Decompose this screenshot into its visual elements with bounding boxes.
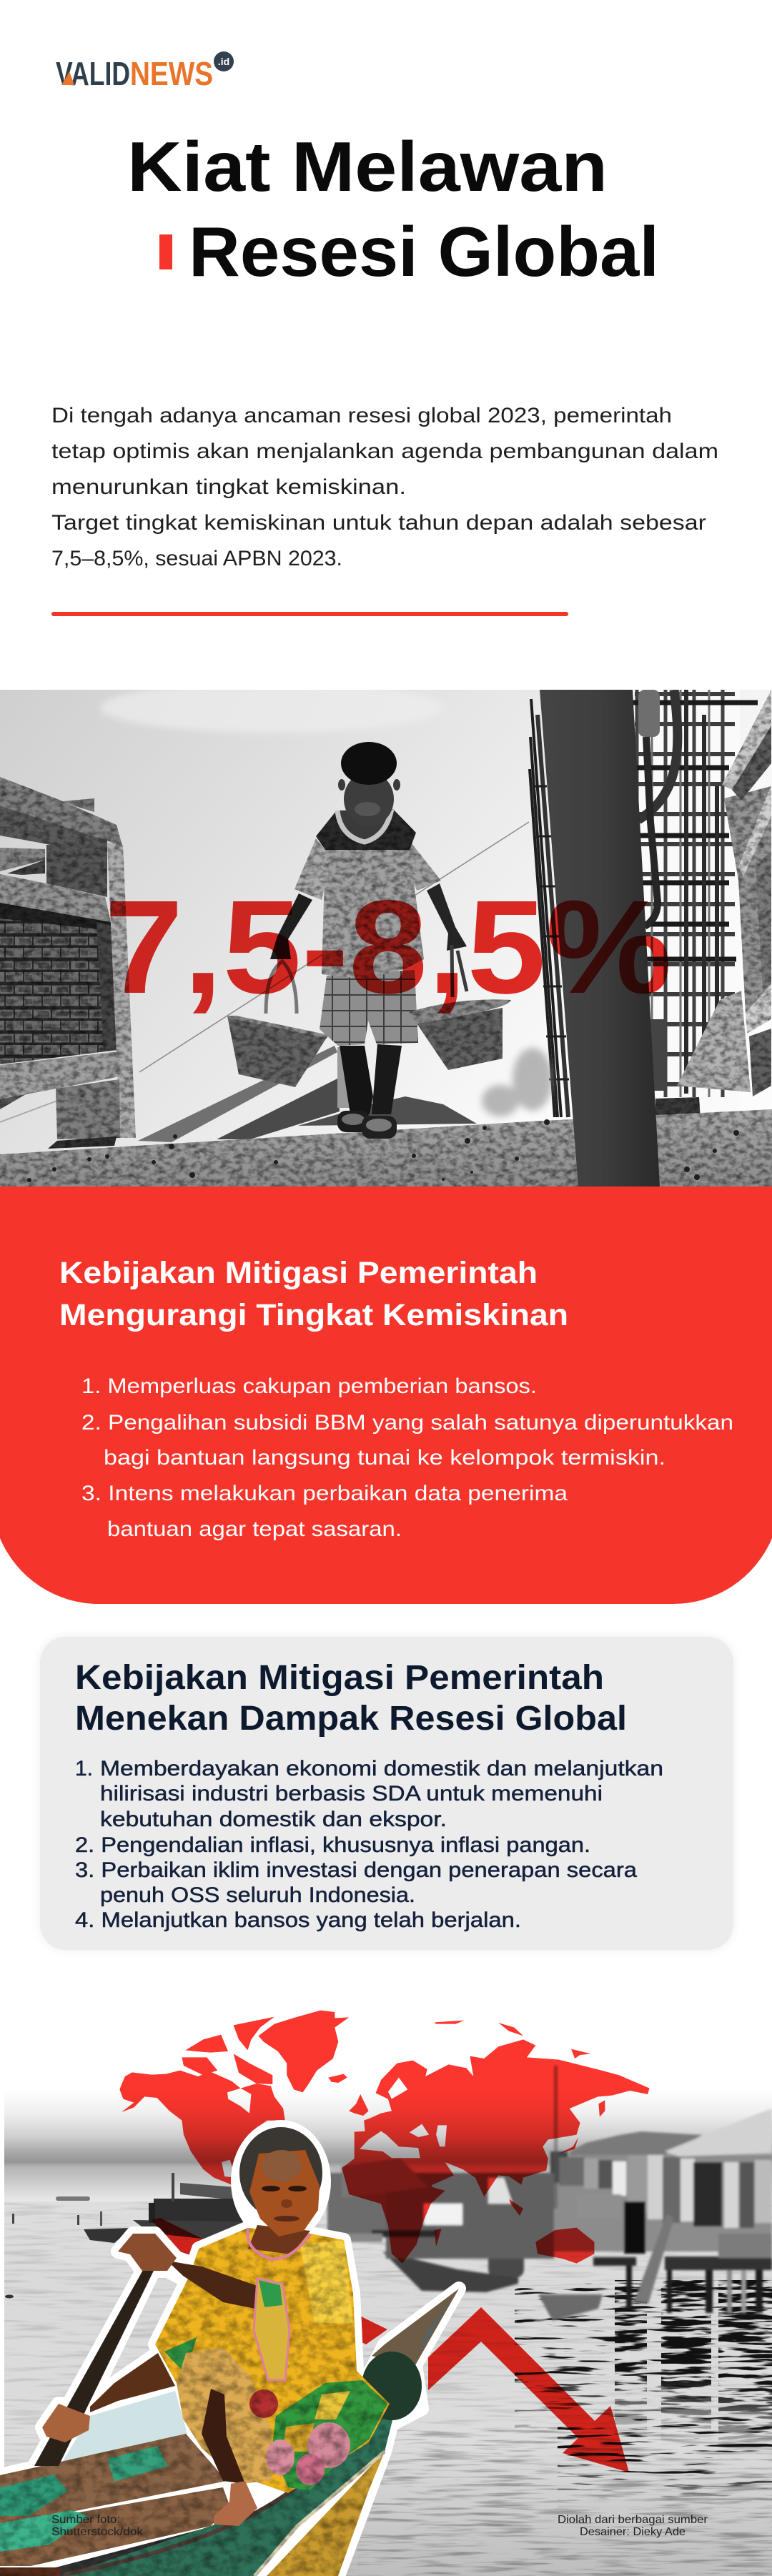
numbered list: Memberdayakan ekonomi domestik dan melanjutkan — [100, 1757, 663, 1780]
boat outer hull — [62, 2392, 400, 2576]
numbered list: 1. — [75, 1757, 93, 1780]
water reflections — [515, 2280, 772, 2509]
boat interior — [0, 2434, 257, 2576]
pole — [540, 690, 660, 1187]
title — [127, 127, 659, 291]
intro paragraph: menurunkan tingkat kemiskinan. — [51, 475, 406, 499]
logo: Validnews.id: NEWS — [130, 55, 213, 92]
panel: poverty mitigation policy — [0, 1187, 772, 1604]
right bucket — [409, 999, 511, 1070]
panel heading: Kebijakan Mitigasi Pemerintah — [75, 1659, 604, 1697]
stilt platform — [538, 2214, 772, 2321]
scaffold left of pole — [530, 699, 569, 1117]
pale water behind arm — [61, 2391, 187, 2464]
intro paragraph — [51, 404, 718, 570]
left bucket — [227, 1016, 327, 1087]
numbered list: 2. Pengalihan subsidi BBM yang salah satunya diperuntukkan — [81, 1411, 733, 1435]
panel heading: Mengurangi Tingkat Kemiskinan — [59, 1298, 568, 1332]
white cut-out outline — [0, 2127, 459, 2576]
legs — [340, 1046, 373, 1114]
red divider line — [51, 612, 568, 616]
laundry — [550, 2151, 772, 2228]
panel heading — [75, 1659, 627, 1738]
bucket handles — [266, 945, 467, 1014]
panel heading: Kebijakan Mitigasi Pemerintah — [59, 1256, 538, 1290]
panel heading — [59, 1256, 568, 1332]
ground — [0, 1109, 772, 1187]
big figure 7,5-8,5%: 7,5-8,5% — [104, 873, 672, 1021]
man on boat — [382, 2229, 524, 2292]
distant boats left — [5, 2173, 243, 2299]
blurred tree — [482, 1048, 553, 1116]
numbered list: 3. Intens melakukan perbaikan data penerima — [81, 1482, 568, 1505]
right building — [655, 690, 771, 1133]
left concrete railing — [0, 777, 136, 1149]
numbered list: kebutuhan domestik dan ekspor. — [100, 1808, 447, 1831]
numbered list — [75, 1757, 663, 1932]
world map — [119, 2011, 650, 2264]
logo: Validnews.id — [56, 51, 234, 92]
logo: Validnews.id: VALID — [56, 55, 130, 92]
woman rowing a boat — [0, 2127, 459, 2576]
shirt — [295, 809, 441, 979]
photo collage: fishing village, world map, falling arrow, woman in boat — [0, 1973, 772, 2576]
shorts — [320, 970, 418, 1046]
photo credit — [51, 2514, 144, 2538]
photo credit: Sumber foto: — [51, 2514, 120, 2526]
panel: recession mitigation policy — [40, 1637, 733, 1950]
source and designer credit: Desainer: Dieky Ade — [580, 2526, 686, 2538]
numbered list — [81, 1374, 733, 1541]
panel heading: Menekan Dampak Resesi Global — [75, 1700, 627, 1738]
numbered list: penuh OSS seluruh Indonesia. — [100, 1883, 415, 1907]
numbered list: 3. Perbaikan iklim investasi dengan penerapan secara — [75, 1858, 637, 1882]
prow and rope — [362, 2289, 459, 2420]
intro paragraph: tetap optimis akan menjalankan agenda pembangunan dalam — [51, 440, 718, 463]
title: Resesi Global — [189, 212, 659, 291]
intro paragraph: Target tingkat kemiskinan untuk tahun depan adalah sebesar — [51, 511, 706, 535]
source and designer credit: Diolah dari berbagai sumber — [558, 2514, 708, 2526]
photo: boy carrying buckets with big percentage — [0, 683, 772, 1187]
sky and water — [4, 2101, 772, 2576]
shin and foot — [202, 2389, 257, 2526]
background roofs and dirt mound — [138, 1046, 477, 1142]
numbered list: bagi bantuan langsung tunai ke kelompok termiskin. — [104, 1446, 665, 1470]
grey stilt village — [327, 2066, 772, 2321]
dress — [155, 2228, 390, 2493]
source and designer credit — [558, 2514, 708, 2538]
paddle — [34, 2243, 164, 2466]
title: Kiat Melawan — [127, 127, 608, 206]
numbered list: 4. Melanjutkan bansos yang telah berjalan. — [75, 1908, 521, 1932]
numbered list: 1. Memperluas cakupan pemberian bansos. — [81, 1374, 537, 1398]
lower arm and hand — [42, 2353, 175, 2442]
logo: Validnews.id: .id — [218, 56, 229, 67]
falling arrow — [152, 2218, 629, 2472]
upper arm, hand and sleeve — [118, 2234, 290, 2380]
arms — [270, 893, 312, 959]
head — [338, 742, 400, 826]
numbered list: 2. Pengendalian inflasi, khususnya inflasi pangan. — [75, 1833, 590, 1857]
scaffold right of pole — [633, 690, 758, 1111]
central houses — [327, 2066, 558, 2259]
numbered list: hilirisasi industri berbasis SDA untuk memenuhi — [100, 1782, 603, 1805]
sandals — [337, 1111, 397, 1139]
numbered list: bantuan agar tepat sasaran. — [107, 1517, 402, 1541]
photo credit: Shutterstock/dok — [51, 2526, 144, 2538]
neck and head — [239, 2127, 322, 2259]
boy — [227, 742, 511, 1139]
intro paragraph: 7,5–8,5%, sesuai APBN 2023. — [51, 547, 342, 570]
intro paragraph: Di tengah adanya ancaman resesi global 2023, pemerintah — [51, 404, 672, 427]
